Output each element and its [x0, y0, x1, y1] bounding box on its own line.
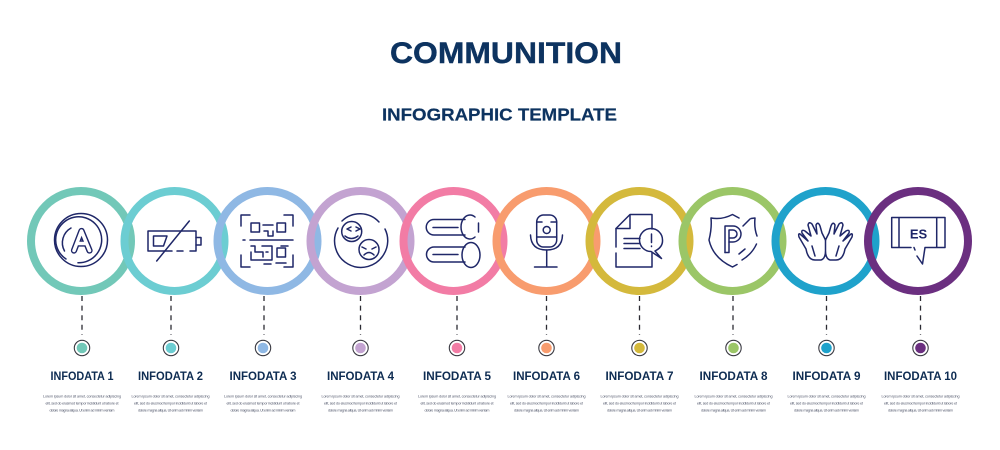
marker 6 [539, 340, 554, 356]
connector 2 [170, 296, 172, 335]
marker 7 [632, 340, 647, 356]
panel: infodata 2 [124, 191, 224, 412]
description 1 [43, 394, 121, 412]
label 7: INFODATA 7 [606, 370, 674, 383]
icon: QR code scan [241, 215, 293, 267]
icon: ES speech bubble: ES [910, 226, 927, 242]
description 10: Lorem ipsum dolor sit amet, consectetur adipiscing [882, 394, 960, 398]
description 5 [418, 394, 496, 412]
marker 4 [353, 340, 368, 356]
label 1: INFODATA 1 [50, 370, 114, 383]
marker 2 [163, 340, 179, 356]
label 4: INFODATA 4 [327, 370, 395, 383]
description 3: dolore magna aliqua. Ut enim ad minim veniam [230, 408, 296, 412]
description 3 [224, 394, 302, 412]
ring 7 [590, 191, 690, 291]
label 2: INFODATA 2 [138, 370, 203, 383]
description 8: Lorem ipsum dolor sit amet, consectetur adipiscing [694, 394, 772, 398]
description 9: dolore magna aliqua. Ut enim ad minim veniam [794, 408, 859, 412]
icon: battery crossed [148, 221, 201, 261]
description 4 [322, 394, 400, 412]
icon: two toggle bars [426, 215, 480, 268]
icon: document with alert bubble [616, 214, 663, 267]
description 10: elit, sed do eiusmod tempor incididunt ut labore et [884, 402, 957, 406]
ring 1 [31, 191, 131, 291]
connector 6 [546, 296, 548, 335]
description 7: dolore magna aliqua. Ut enim ad minim veniam [607, 408, 672, 412]
description 8 [694, 394, 772, 412]
panel: infodata 6 [496, 191, 596, 412]
connector 9 [826, 296, 828, 335]
title: COMMUNITION [390, 37, 622, 70]
panel: infodata 10 [868, 191, 968, 412]
label 3: INFODATA 3 [230, 370, 297, 383]
description 6: Lorem ipsum dolor sit amet, consectetur adipiscing [508, 394, 586, 398]
ring 10 [868, 191, 968, 291]
marker 5 [449, 340, 465, 356]
description 8: elit, sed do eiusmod tempor incididunt ut labore et [697, 402, 770, 406]
description 6: dolore magna aliqua. Ut enim ad minim veniam [514, 408, 579, 412]
description 10 [882, 394, 960, 412]
connector 10 [920, 296, 922, 335]
ring 8 [682, 191, 782, 291]
panel: infodata 7 [590, 191, 690, 412]
icon: happy and sad faces [335, 214, 388, 267]
description 2: dolore magna aliqua. Ut enim ad minim veniam [138, 408, 203, 412]
description 4: Lorem ipsum dolor sit amet, consectetur adipiscing [322, 394, 400, 398]
subtitle: INFOGRAPHIC TEMPLATE [382, 105, 617, 125]
description 8: dolore magna aliqua. Ut enim ad minim veniam [701, 408, 766, 412]
ring 2 [124, 191, 224, 291]
marker 1 [74, 340, 90, 356]
panel: infodata 1 [31, 191, 131, 412]
panel: infodata 5 [404, 191, 504, 412]
description 7 [600, 394, 678, 412]
description 5: Lorem ipsum dolor sit amet, consectetur adipiscing [418, 394, 496, 398]
description 2: Lorem ipsum dolor sit amet, consectetur adipiscing [132, 394, 210, 398]
connector 4 [360, 296, 362, 335]
panel: infodata 8 [682, 191, 782, 412]
ring 5 [404, 191, 504, 291]
description 1: Lorem ipsum dolor sit amet, consectetur adipiscing [43, 394, 121, 398]
ring 6 [496, 191, 596, 291]
icon: microphone [530, 215, 562, 267]
label 5: INFODATA 5 [423, 370, 492, 383]
description 4: elit, sed do eiusmod tempor incididunt ut labore et [324, 402, 397, 406]
label 10: INFODATA 10 [884, 370, 957, 383]
description 9: elit, sed do eiusmod tempor incididunt ut labore et [790, 402, 863, 406]
connector 1 [81, 296, 83, 335]
description 9: Lorem ipsum dolor sit amet, consectetur adipiscing [788, 394, 866, 398]
connector 5 [456, 296, 458, 335]
marker 8 [726, 340, 741, 356]
marker 10 [913, 340, 928, 356]
description 3: elit, sed do eiusmod tempor incididunt ut labore et [226, 402, 300, 406]
description 5: dolore magna aliqua. Ut enim ad minim veniam [424, 408, 490, 412]
description 1: dolore magna aliqua. Ut enim ad minim veniam [50, 408, 114, 412]
description 6: elit, sed do eiusmod tempor incididunt ut labore et [510, 402, 583, 406]
label 8: INFODATA 8 [700, 370, 768, 383]
connector 3 [263, 296, 265, 335]
panel: infodata 9 [776, 191, 876, 412]
icon: two open hands [799, 223, 852, 260]
connector 7 [638, 296, 640, 335]
connector 8 [732, 296, 734, 335]
ring 3 [218, 191, 318, 291]
description 1: elit, sed do eiusmod tempor incididunt ut labore et [46, 402, 118, 406]
description 7: elit, sed do eiusmod tempor incididunt ut labore et [603, 402, 676, 406]
label 9: INFODATA 9 [792, 370, 861, 383]
marker 3 [255, 340, 271, 356]
icon: parking shield [709, 214, 757, 267]
icon: ES speech bubble [892, 218, 945, 264]
description 2 [132, 394, 210, 412]
panel: infodata 3 [218, 191, 318, 412]
icon: letter A in circle [54, 214, 108, 266]
description 10: dolore magna aliqua. Ut enim ad minim veniam [888, 408, 953, 412]
marker 9 [819, 340, 834, 356]
ring 4 [310, 191, 410, 291]
description 4: dolore magna aliqua. Ut enim ad minim veniam [328, 408, 393, 412]
description 2: elit, sed do eiusmod tempor incididunt ut labore et [134, 402, 207, 406]
description 5: elit, sed do eiusmod tempor incididunt ut labore et [420, 402, 494, 406]
description 7: Lorem ipsum dolor sit amet, consectetur adipiscing [600, 394, 678, 398]
ring 9 [776, 191, 876, 291]
description 3: Lorem ipsum dolor sit amet, consectetur adipiscing [224, 394, 302, 398]
label 6: INFODATA 6 [513, 370, 581, 383]
description 9 [788, 394, 866, 412]
description 6 [508, 394, 586, 412]
panel: infodata 4 [310, 191, 410, 412]
